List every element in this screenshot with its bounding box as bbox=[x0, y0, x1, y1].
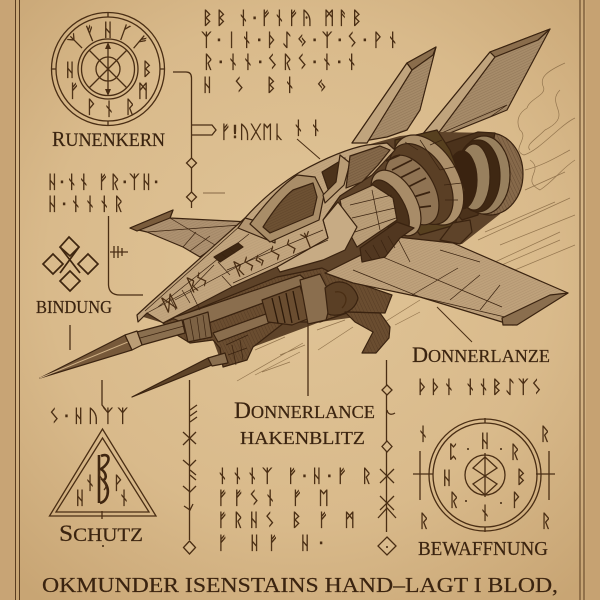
engine support block bbox=[440, 220, 472, 244]
hull rune inscriptions: ᚱᛊ bbox=[183, 268, 212, 297]
rune text: donnerlanze: ᚦᚦᚾ ᚾᚾᛒᛇᛉᛊ bbox=[417, 377, 542, 398]
label: flugel runes: ᚾ ᚾ bbox=[293, 118, 321, 139]
connector: schutz stem bbox=[102, 380, 106, 410]
footer caption: OKMUNDER ISENSTAINS HAND–LAGT I BLOD, bbox=[42, 573, 558, 597]
icon: runenkern circle: ᛉ bbox=[65, 31, 88, 54]
lower lance bbox=[132, 353, 228, 397]
rune text block: top: ᚺ ᛊ ᛒᚾ ᛃ bbox=[202, 75, 327, 96]
lower mechanism bbox=[163, 268, 392, 367]
label: bewaffnung: BEWAFFNUNG bbox=[418, 538, 548, 560]
hull rune inscriptions: ᛞ bbox=[160, 292, 179, 316]
icon: bewaffnung circle: ᚾ bbox=[480, 503, 490, 524]
fuselage cylinder bbox=[340, 185, 414, 262]
speed lines and exhaust smoke bbox=[237, 63, 575, 381]
connector: runenkern to flugel bbox=[173, 72, 225, 208]
icon: runenkern circle: ᚠ bbox=[82, 22, 100, 45]
icon: bewaffnung circle bbox=[413, 418, 555, 532]
icon: runenkern circle: ᚹ bbox=[86, 97, 96, 118]
icon: runenkern circle: ᚠ bbox=[129, 32, 151, 55]
label: schutz: SCHUTZ bbox=[59, 521, 143, 546]
label: schutz runes: ᛊ·ᚺᚢᛉᛉ bbox=[49, 406, 128, 427]
icon: bewaffnung circle: ᚱ bbox=[540, 424, 550, 445]
rune text block: centre: ᚠᚠᛊᚾ ᚠ ᛖ bbox=[217, 488, 329, 509]
rune text block: top: ᚱ·ᚾᚾ·ᛊᚱᛊ·ᚾ·ᚾ bbox=[203, 52, 357, 73]
rune text block: centre: ᚠᚱᚺᛊ ᛒ ᚠ ᛗ bbox=[217, 510, 355, 531]
landing gear bbox=[345, 312, 390, 353]
icon: runenkern circle bbox=[51, 12, 165, 126]
rune text block: left bbox=[47, 172, 159, 215]
icon: bewaffnung circle: ᚱ bbox=[449, 490, 459, 511]
icon: bewaffnung circle: ᚺ bbox=[480, 431, 490, 452]
icon: runenkern circle: ᚺ bbox=[103, 20, 113, 41]
far wing bbox=[130, 210, 250, 257]
icon: bewaffnung circle: ᚺ bbox=[442, 468, 452, 489]
hull rune inscriptions: ᚱᛊᛃ ᛊ ᛊ ᛉ bbox=[230, 229, 317, 281]
illustration: starship bbox=[40, 29, 568, 397]
icon: bewaffnung circle: ᚱ bbox=[541, 511, 551, 532]
icon: runenkern circle: ᚺ bbox=[65, 60, 75, 81]
rune text block: left: ᚺ·ᚾᚾᚾᚱ bbox=[47, 194, 124, 215]
hull rune inscriptions bbox=[160, 229, 317, 316]
upper lance bbox=[40, 320, 185, 378]
label: donnerlanze: DONNERLANZE bbox=[412, 342, 550, 367]
icon: bewaffnung circle: ᛈ bbox=[448, 442, 458, 463]
rune text block: centre: ᚾᚾᚾᛉ ᚠ·ᚺ·ᚠ ᚱ bbox=[217, 466, 372, 487]
pointer: wing to donnerlanze bbox=[437, 307, 472, 342]
icon: schutz triangle: ᚾ bbox=[85, 473, 95, 494]
icon: bewaffnung circle: ᚹ bbox=[511, 490, 521, 511]
icon: schutz triangle: ᚹ bbox=[113, 473, 123, 494]
icon: bewaffnung circle: ᚱ bbox=[419, 511, 429, 532]
stem with rune marks: centre left bbox=[183, 380, 197, 554]
connector: bindung stem bbox=[69, 325, 71, 350]
ship silhouette underlay bbox=[137, 132, 523, 367]
hull upper deck and collar bbox=[137, 143, 395, 323]
label: flugel runes: ᚠ!ᚢᚷᛖᚳ bbox=[220, 122, 284, 143]
rune text block: top: ᛒᛒ ᚾ·ᚠᚾᚠᚤ ᛗᚨᛒ bbox=[202, 8, 362, 29]
rune text block: top: ᛉ·ᛁᚾ·ᚦᛇᛃ·ᛉ·ᛊ·ᚹᚾ bbox=[201, 30, 398, 51]
connector: bindung bracket bbox=[108, 216, 143, 295]
icon: schutz triangle: ᚾ bbox=[119, 488, 129, 509]
icon: runenkern circle: ᚾ bbox=[104, 99, 114, 120]
right wing bbox=[325, 237, 568, 325]
stem: hull to donnerlance bbox=[307, 325, 309, 396]
engine nacelle bbox=[440, 132, 523, 220]
rune text block: top bbox=[201, 8, 398, 96]
icon: runenkern circle: ᚠ bbox=[69, 81, 79, 102]
label: runenkern: RUNENKERN bbox=[52, 127, 165, 151]
tail fin right bbox=[422, 29, 550, 137]
icon: bewaffnung circle: ᛒ bbox=[516, 467, 526, 488]
icon: runenkern circle: ᛗ bbox=[138, 81, 148, 102]
label: bindung: BINDUNG bbox=[36, 297, 112, 317]
rune text block: centre bbox=[217, 466, 372, 554]
icon: runenkern circle: ᚴ bbox=[116, 22, 134, 45]
icon: bindung knot bbox=[43, 237, 98, 291]
tail fin left bbox=[352, 47, 436, 143]
label: hakenblitz: HAKENBLITZ bbox=[240, 428, 365, 448]
icon: schutz triangle bbox=[50, 429, 156, 519]
rune text block: left: ᚺ·ᚾᚾ ᚠᚱ·ᛉᚺ· bbox=[47, 172, 159, 193]
label: donnerlance: DONNERLANCE bbox=[234, 398, 375, 423]
icon: schutz triangle: ᚺ bbox=[75, 488, 85, 509]
hull ring with gear bbox=[361, 123, 478, 244]
icon: bewaffnung circle: ᚱ bbox=[510, 442, 520, 463]
icon: bewaffnung circle: ᚾ bbox=[418, 424, 428, 445]
icon: runenkern circle: ᛒ bbox=[142, 59, 152, 80]
icon: runenkern circle: ᚱ bbox=[125, 97, 135, 118]
stem with diamonds: centre right bbox=[378, 360, 396, 555]
cockpit canopy bbox=[250, 146, 390, 242]
label: flugel runes bbox=[220, 118, 321, 159]
rune text block: centre: ᚠ ᚺᚠ ᚺ· bbox=[217, 533, 324, 554]
